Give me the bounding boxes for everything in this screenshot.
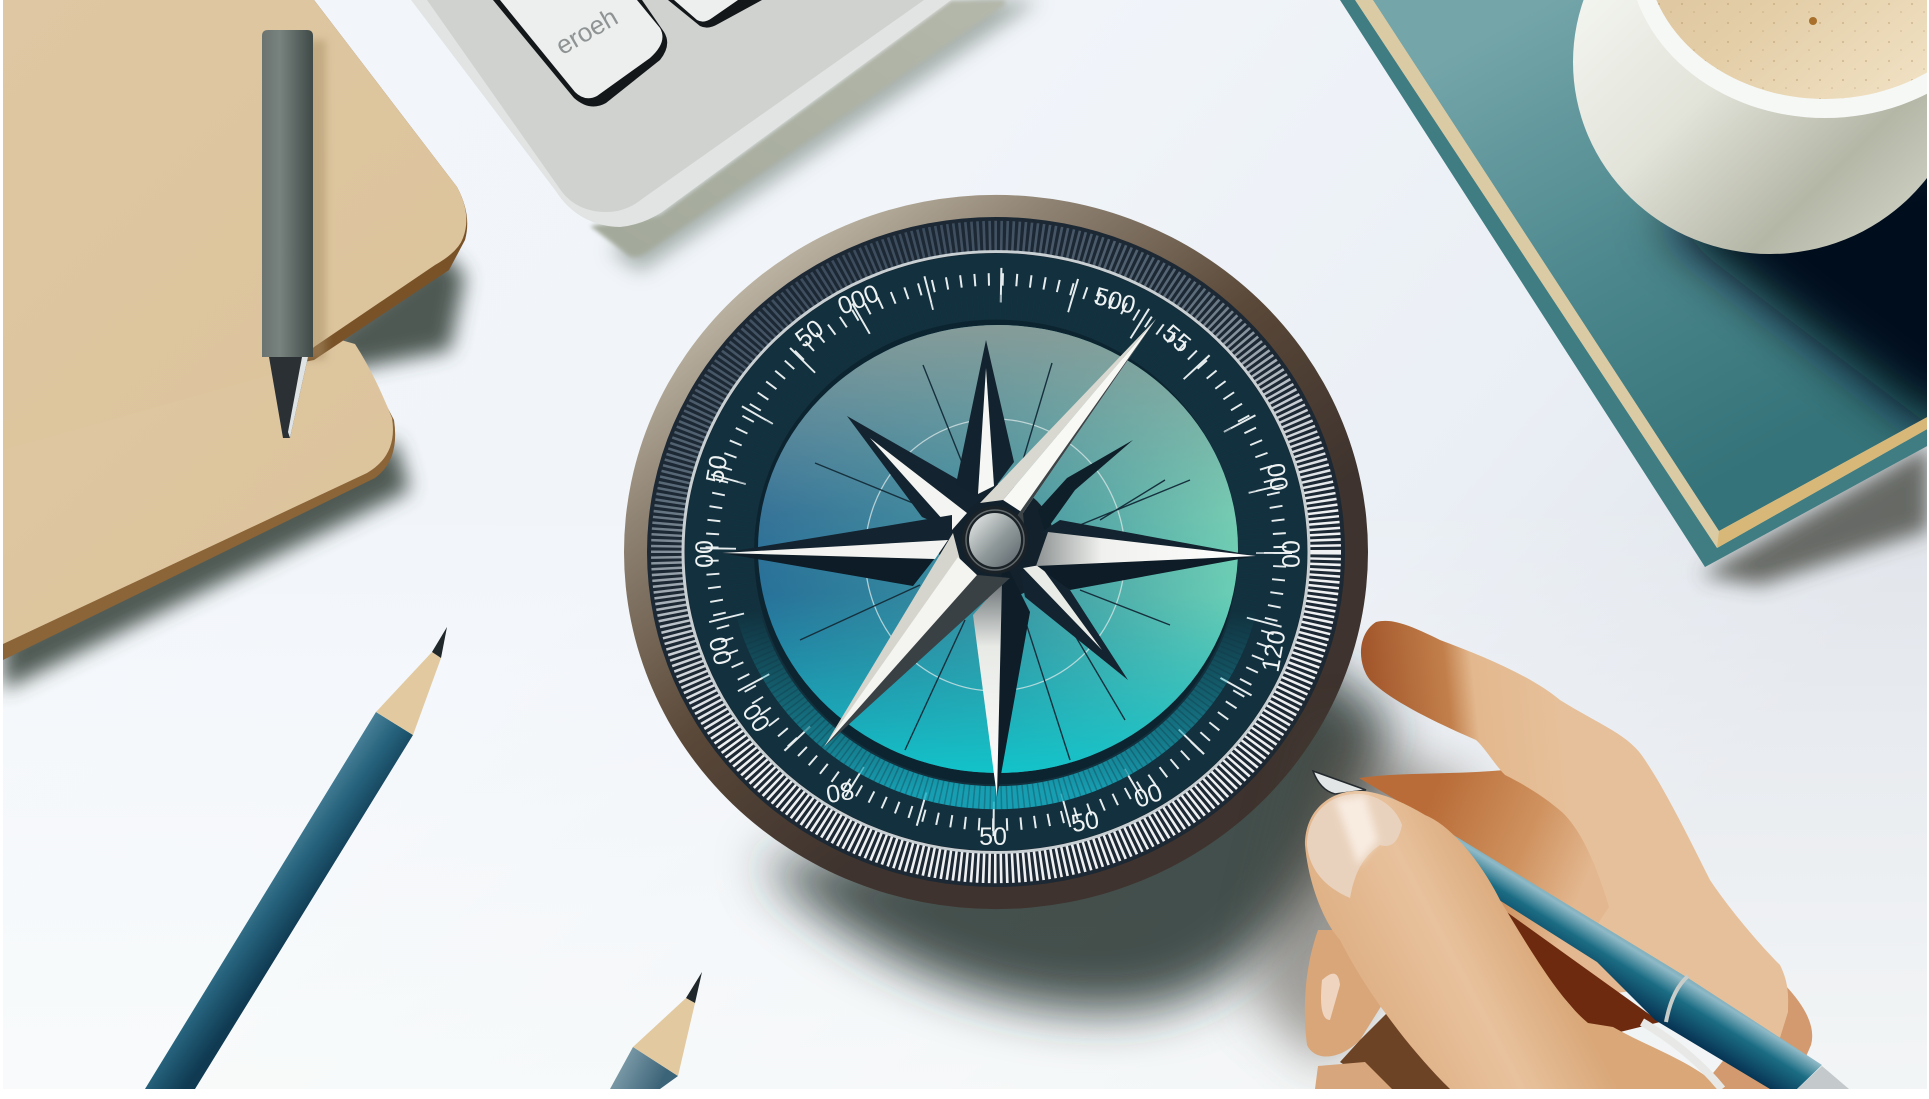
coffee speck bbox=[1809, 17, 1817, 25]
dial numbers bbox=[691, 279, 1304, 851]
rose: dark core bbox=[938, 484, 1054, 600]
needle bbox=[824, 319, 1156, 747]
keyboard bbox=[411, 0, 1005, 257]
dial numbers: 08 bbox=[824, 777, 856, 809]
inner ring and spikes bbox=[800, 363, 1190, 760]
compass rose bbox=[722, 340, 1256, 797]
wooden rim bbox=[624, 195, 1368, 909]
rose: south-east point bbox=[1020, 565, 1128, 680]
shadow: compass bbox=[760, 650, 1390, 1011]
index finger bbox=[1361, 621, 1788, 1070]
rose: east point bbox=[1036, 520, 1256, 590]
dial numbers: 00 bbox=[1261, 461, 1293, 493]
thumb bbox=[1305, 791, 1722, 1089]
hand holding pen bbox=[1250, 621, 1849, 1089]
dial numbers: 50 bbox=[979, 823, 1007, 851]
dial numbers: 500 bbox=[1091, 282, 1139, 320]
hatched scale ring bbox=[647, 217, 1345, 887]
shadow: book bbox=[1700, 445, 1929, 585]
rose: north point bbox=[956, 340, 1014, 497]
teal book bbox=[1340, 0, 1929, 585]
dial numbers: 00 bbox=[704, 634, 738, 668]
dial numbers: 00 bbox=[1130, 778, 1166, 814]
needle: north-east half bbox=[980, 319, 1156, 550]
dial numbers: 00 bbox=[1276, 540, 1304, 568]
pen tip bbox=[1313, 771, 1366, 794]
dial numbers: 50 bbox=[790, 314, 829, 353]
pen clip bbox=[1642, 1022, 1722, 1089]
notebook: lower tan bbox=[3, 340, 396, 660]
compass bbox=[624, 195, 1368, 909]
dial numbers: 50 bbox=[701, 453, 733, 485]
needle: south-west half bbox=[824, 533, 1010, 747]
dial numbers: 120 bbox=[1257, 628, 1291, 674]
lower finger bbox=[1305, 930, 1470, 1089]
palm shadow bbox=[1490, 900, 1660, 1032]
dial numbers: 00 bbox=[737, 698, 776, 737]
teal glow band bbox=[740, 306, 1252, 798]
rose: west point bbox=[722, 515, 952, 586]
key: eroeh: eroeh bbox=[550, 2, 623, 61]
rose: north-west point bbox=[847, 416, 968, 530]
key: second bbox=[668, 0, 762, 28]
dial numbers: 55 bbox=[1157, 319, 1196, 358]
compass body bbox=[624, 195, 1368, 909]
dial numbers: 50 bbox=[1069, 806, 1101, 838]
hub bbox=[962, 506, 1028, 574]
key: eroeh bbox=[493, 0, 667, 107]
dial ticks bbox=[712, 279, 1280, 825]
thumb nail bbox=[1307, 794, 1402, 898]
pencil: left bbox=[145, 627, 447, 1089]
dial numbers: 00 bbox=[691, 540, 719, 568]
dark dial ring bbox=[685, 253, 1307, 851]
back finger bbox=[1700, 985, 1812, 1089]
rose: south point bbox=[973, 560, 1030, 797]
pen barrel bbox=[1424, 817, 1849, 1089]
shadow: hand bbox=[1250, 720, 1480, 1070]
coffee cup bbox=[1573, 0, 1929, 254]
dial numbers: 000 bbox=[834, 279, 883, 321]
gradient dial face bbox=[758, 325, 1238, 773]
grey pen bbox=[262, 30, 326, 438]
middle finger bbox=[1359, 760, 1650, 1000]
shadow: notebooks bbox=[3, 250, 465, 690]
pencil: bottom bbox=[610, 972, 702, 1089]
shadow: cup on book bbox=[1660, 130, 1929, 425]
shadow: keyboard bbox=[610, 0, 1040, 272]
rose: north-east point bbox=[1038, 440, 1133, 532]
notebook: upper tan bbox=[3, 0, 468, 362]
